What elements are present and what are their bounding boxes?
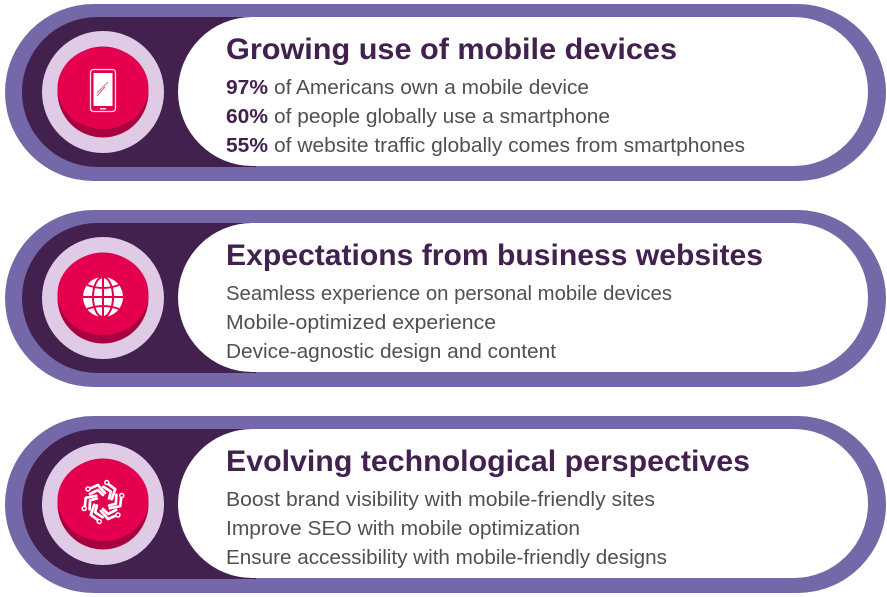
white content pill	[178, 429, 868, 578]
perspective line 2: Improve SEO with mobile optimization	[226, 517, 580, 540]
dark icon band	[22, 223, 256, 373]
icon: phone in button	[42, 31, 164, 153]
dark icon band	[22, 429, 256, 579]
heading: Expectations from business websites	[226, 239, 763, 272]
stat line 1: 97%	[226, 76, 268, 99]
perspective line 1: Boost brand visibility with mobile-friendly sites	[226, 488, 655, 511]
stat line 3: 55%	[226, 134, 268, 157]
icon: globe in button	[42, 237, 164, 359]
stat line 3: of website traffic globally comes from smartphones	[274, 134, 745, 157]
expectation line 2: Mobile-optimized experience	[226, 311, 496, 334]
dark icon band	[22, 17, 256, 167]
panel frame	[5, 210, 886, 387]
panel: expectations from business websites	[5, 210, 886, 387]
stat line 2: of people globally use a smartphone	[274, 105, 610, 128]
panel frame	[5, 416, 886, 593]
perspective line 3: Ensure accessibility with mobile-friendly designs	[226, 546, 667, 569]
panel frame	[5, 4, 886, 181]
panel: evolving technological perspectives	[5, 416, 886, 593]
heading: Growing use of mobile devices	[226, 33, 677, 66]
white content pill	[178, 17, 868, 166]
panel: growing use of mobile devices	[5, 4, 886, 181]
stat line 2: 60%	[226, 105, 268, 128]
expectation line 1: Seamless experience on personal mobile devices	[226, 282, 672, 305]
icon: circuit ring in button	[42, 443, 164, 565]
expectation line 3: Device-agnostic design and content	[226, 340, 556, 363]
stat line 1: of Americans own a mobile device	[274, 76, 589, 99]
white content pill	[178, 223, 868, 372]
heading: Evolving technological perspectives	[226, 445, 750, 478]
